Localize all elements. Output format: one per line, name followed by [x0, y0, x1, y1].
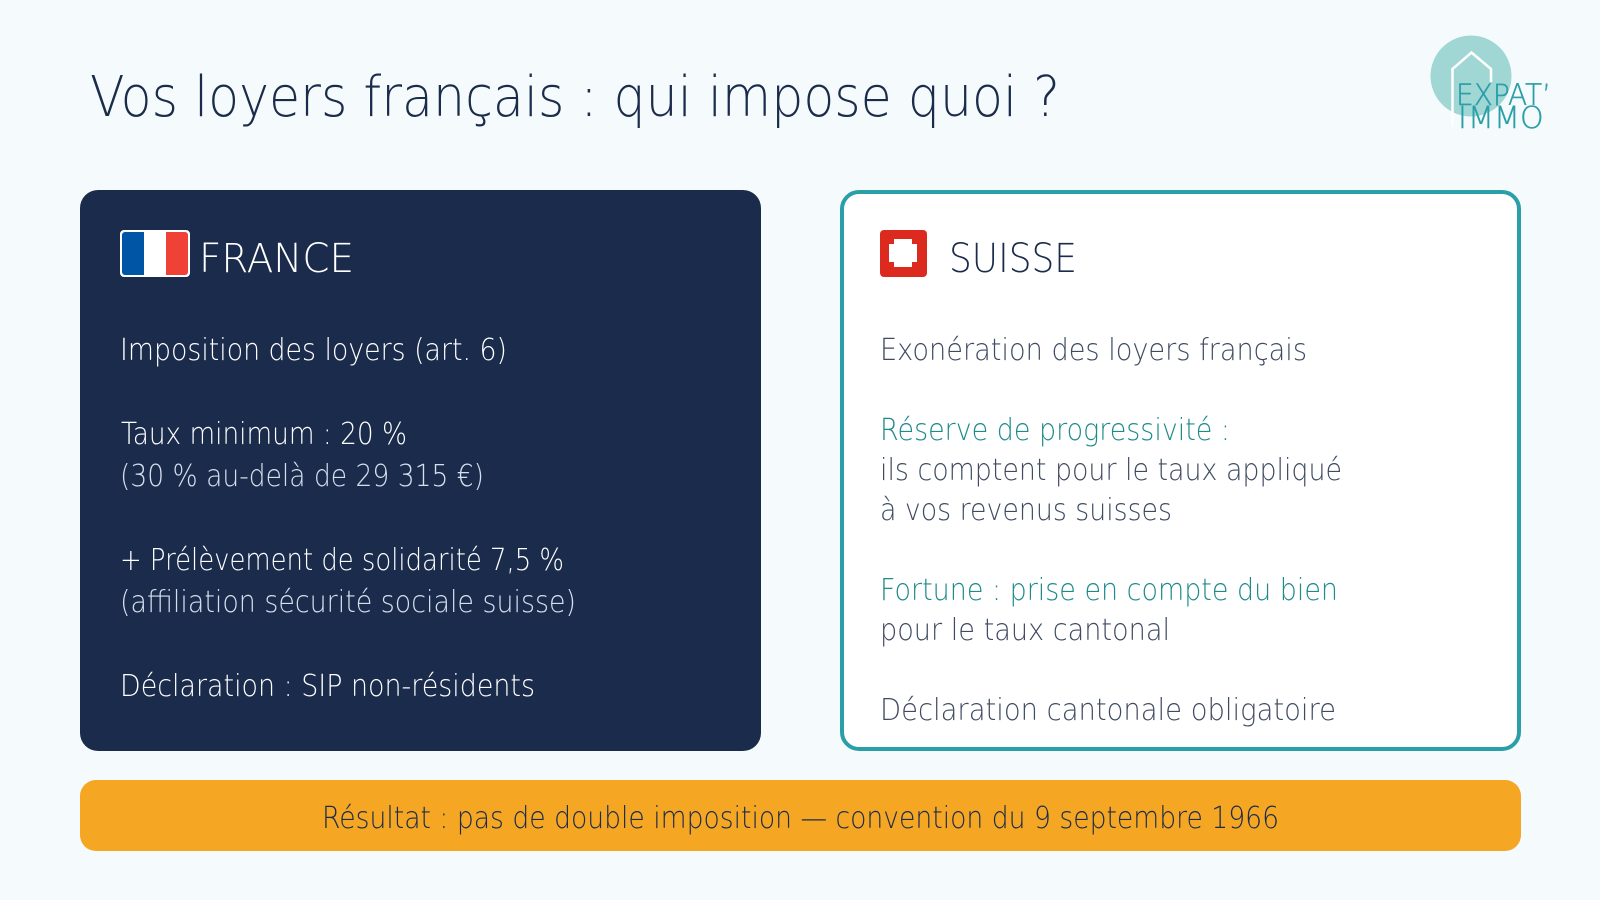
result banner: [80, 780, 1521, 851]
heading: Suisse: SUISSE: [949, 236, 1077, 282]
text: 30 percent threshold: (30 % au-delà de 29 315 €): [120, 459, 484, 494]
icon: French flag: [121, 231, 189, 276]
text: solidarity levy: + Prélèvement de solidarité 7,5 %: [120, 543, 564, 578]
text: cantonal rate: pour le taux cantonal: [880, 613, 1170, 648]
logo: Expat' Immo: [1430, 36, 1551, 136]
icon: Swiss flag: [880, 230, 927, 277]
text: social security affiliation: (affiliation sécurité sociale suisse): [120, 585, 576, 620]
text: progressivity reserve: Réserve de progressivité :: [880, 413, 1230, 448]
title: Vos loyers français : qui impose quoi ?: [90, 65, 1060, 130]
logo: Expat' Immo: EXPAT’: [1456, 78, 1551, 112]
heading: France: FRANCE: [199, 236, 354, 282]
logo: Expat' Immo: IMMO: [1458, 101, 1544, 136]
text: cantonal declaration: Déclaration cantonale obligatoire: [880, 693, 1336, 728]
text: wealth: Fortune : prise en compte du bien: [880, 573, 1338, 608]
text: minimum rate: Taux minimum : 20 %: [121, 417, 407, 452]
text: result: Résultat : pas de double imposition — convention du 9 septembre 1966: [322, 801, 1279, 836]
panel: Suisse: [842, 192, 1519, 749]
panel: France: [80, 190, 761, 751]
text: exemption: Exonération des loyers français: [880, 333, 1307, 368]
text: progressivity explanation line 2: à vos revenus suisses: [880, 493, 1172, 528]
text: declaration: Déclaration : SIP non-résidents: [120, 669, 535, 704]
text: progressivity explanation line 1: ils comptent pour le taux appliqué: [880, 453, 1342, 488]
text: taxation of rents: Imposition des loyers (art. 6): [120, 333, 507, 368]
